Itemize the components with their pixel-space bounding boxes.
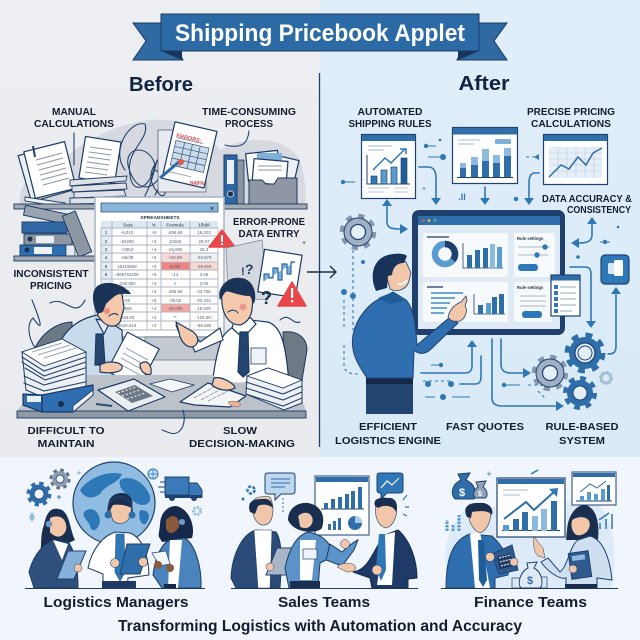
confused documents and chart xyxy=(226,240,306,308)
label: time-consuming process: TIME-CONSUMING xyxy=(202,106,296,118)
label: inconsistent pricing xyxy=(14,268,89,292)
sales dashboard board xyxy=(315,476,369,535)
label: difficult to maintain: DIFFICULT TO xyxy=(28,425,104,437)
spreadsheet window: 25.3 xyxy=(200,247,209,252)
spreadsheet window: -39.03 xyxy=(169,298,182,303)
spreadsheet window: :653.03 xyxy=(120,315,135,320)
spreadsheet window: +5 xyxy=(151,255,157,260)
label: automated shipping rules: SHIPPING RULES xyxy=(348,118,432,130)
icon: money bags: $ xyxy=(478,491,482,498)
spreadsheet window: × xyxy=(174,281,177,286)
loose papers on desk xyxy=(150,378,246,407)
stressed worker right xyxy=(176,278,289,390)
card: rule settings top: Rule settings xyxy=(517,236,544,241)
icon: globe small xyxy=(148,469,158,479)
calculator xyxy=(96,379,165,411)
spreadsheet window: 2 xyxy=(105,239,108,244)
icon: coins and bag: $ xyxy=(527,575,533,587)
ground line xyxy=(231,588,418,590)
label: error-prone data entry xyxy=(233,216,305,240)
spreadsheet window: -16,665 xyxy=(168,247,183,252)
label: rule-based system xyxy=(546,421,619,447)
spreadsheet window: +3 xyxy=(151,239,157,244)
label: sales teams: Sales Teams xyxy=(278,594,370,611)
globe xyxy=(73,462,155,544)
tagline: Transforming Logistics with Automation and Accuracy xyxy=(118,618,522,635)
spreadsheet window: 5 xyxy=(105,264,108,269)
spreadsheet window: -53265 xyxy=(120,239,134,244)
spreadsheet window: 83.403 xyxy=(197,298,211,303)
label: error-prone data entry: ERROR-PRONE xyxy=(233,216,305,228)
spreadsheet window: 50 xyxy=(125,289,130,294)
window: line chart xyxy=(544,134,608,184)
confused documents and chart: ? xyxy=(261,288,272,308)
label: slow decision-making: SLOW xyxy=(223,425,257,437)
large growth chart xyxy=(497,478,565,537)
spreadsheet window: +3 xyxy=(151,315,157,320)
spreadsheet window: 3665 xyxy=(122,306,132,311)
small growth chart xyxy=(572,472,616,505)
title banner: Shipping Pricebook Applet xyxy=(175,20,465,47)
spreadsheet window: 5620.016 xyxy=(118,323,137,328)
label: inconsistent pricing: PRICING xyxy=(30,280,72,292)
label: efficient logistics engine: EFFICIENT xyxy=(359,421,418,433)
blue binder on shelf xyxy=(224,155,244,204)
panel: after background xyxy=(320,0,640,457)
person: salesman right xyxy=(337,498,417,588)
label: manual calculations: CALCULATIONS xyxy=(34,118,114,130)
panel: audience background xyxy=(0,457,640,640)
paper stack left xyxy=(22,339,86,396)
paper stack right xyxy=(246,368,302,410)
spreadsheet window: 1 xyxy=(105,230,108,235)
spreadsheet window: 6 xyxy=(105,272,108,277)
small decorations: + xyxy=(486,469,492,479)
spreadsheet window: +5 xyxy=(151,272,157,277)
heading: after: After xyxy=(458,73,510,95)
spreadsheet window: -290:052 xyxy=(118,281,136,286)
upper shelf xyxy=(14,204,307,209)
label: slow decision-making: DECISION-MAKING xyxy=(189,438,295,450)
monitor stand and wires xyxy=(145,337,225,360)
man presenting dashboard xyxy=(352,254,467,414)
tangled wires xyxy=(120,124,249,205)
stressed worker left xyxy=(58,283,159,388)
spreadsheet window: 5.009 xyxy=(170,264,181,269)
label: data accuracy and consistency xyxy=(542,193,632,216)
spreadsheet window: ** xyxy=(173,315,177,320)
window: rules chart xyxy=(362,134,416,198)
spreadsheet window: Formula xyxy=(166,222,184,228)
label: time-consuming process xyxy=(202,106,296,130)
confused documents and chart: + xyxy=(302,240,306,247)
spreadsheet window: 10258 xyxy=(169,239,182,244)
spreadsheet window: +4 xyxy=(151,289,157,294)
spreadsheet window: -368.69 xyxy=(168,289,183,294)
label: rule-based system: RULE-BASED xyxy=(546,421,619,433)
blue binder on desk xyxy=(23,385,93,412)
icon: coins and bag xyxy=(512,562,547,588)
spreadsheet window: × xyxy=(210,206,214,212)
label: error-prone data entry: DATA ENTRY xyxy=(238,228,300,240)
soft background blob xyxy=(445,500,615,588)
error document: ERRORS: xyxy=(176,133,202,145)
desk xyxy=(17,375,306,418)
gear: pale xyxy=(600,372,612,384)
spreadsheet window: +3353 xyxy=(121,247,134,252)
label: fast quotes: FAST QUOTES xyxy=(446,421,524,433)
spreadsheet window: 3 xyxy=(105,247,108,252)
card: donut and bars xyxy=(423,233,508,277)
paper stack: manual calculations xyxy=(18,133,127,207)
divider arrow from before to after xyxy=(307,73,336,447)
label: slow decision-making xyxy=(189,425,295,450)
spreadsheet window: 16,203 xyxy=(197,230,211,235)
audience: logistics managers xyxy=(25,462,205,588)
person: finance man xyxy=(446,503,518,588)
workflow arrows: + xyxy=(422,186,426,193)
spreadsheet window: 29.07 xyxy=(198,239,210,244)
icon: money bags xyxy=(452,473,487,499)
icon: shared document xyxy=(601,255,629,284)
confused documents and chart: ? xyxy=(245,261,254,277)
label: automated shipping rules xyxy=(348,106,432,130)
person: man with headset xyxy=(88,493,150,588)
gear: gray xyxy=(52,470,68,488)
gear: blue xyxy=(29,484,49,504)
person: finance woman xyxy=(534,505,612,588)
label: inconsistent pricing: INCONSISTENT xyxy=(14,268,89,280)
small decorations xyxy=(29,468,200,522)
spreadsheet window: -556791208 xyxy=(115,272,139,277)
confused documents and chart: ! xyxy=(241,266,245,278)
spreadsheet window: 1/fabl xyxy=(198,222,210,228)
icon: money bags: $ xyxy=(459,487,465,499)
spreadsheet window: +3 xyxy=(151,306,157,311)
spreadsheet window: -36/38 xyxy=(121,255,134,260)
spreadsheet window: +4 xyxy=(151,247,157,252)
card: rule settings top xyxy=(514,233,555,277)
label: rule-based system: SYSTEM xyxy=(559,435,605,447)
label: time-consuming process: PROCESS xyxy=(225,118,273,130)
spreadsheet window: -39.569 xyxy=(197,264,212,269)
spreadsheet window: +8 xyxy=(151,230,157,235)
ground line xyxy=(25,588,205,590)
spreadsheet window: -50 xyxy=(124,298,131,303)
small decorations xyxy=(242,486,409,516)
audience: sales teams xyxy=(231,473,418,588)
error document xyxy=(158,122,217,192)
error document: 849% xyxy=(190,181,204,187)
card: rule settings bottom xyxy=(514,282,552,322)
label: data accuracy and consistency: DATA ACCURACY & xyxy=(542,193,632,205)
background stress scribbles xyxy=(29,300,300,350)
background blob xyxy=(20,120,305,205)
title banner xyxy=(133,14,507,60)
label: precise pricing calculations: CALCULATIONS xyxy=(531,118,611,130)
ground line xyxy=(441,588,618,590)
label: precise pricing calculations: PRECISE PRICING xyxy=(527,106,615,118)
spreadsheet window: +50.69 xyxy=(168,255,182,260)
card: list and bars xyxy=(423,282,508,322)
label: manual calculations: MANUAL xyxy=(52,106,97,118)
binders on lower shelf xyxy=(14,205,95,261)
panel: before background xyxy=(0,0,320,457)
warning triangle upper xyxy=(209,230,235,247)
label: difficult to maintain: MAINTAIN xyxy=(38,438,94,450)
label: manual calculations xyxy=(34,106,114,130)
illustration: cluttered before workspace xyxy=(14,120,307,433)
document folder xyxy=(246,150,299,204)
person: woman left xyxy=(29,509,86,588)
spreadsheet window: +3 xyxy=(151,281,157,286)
spreadsheet window: -295.69 xyxy=(168,230,183,235)
person: saleswoman xyxy=(285,503,358,588)
label: efficient logistics engine xyxy=(335,421,441,447)
label: difficult to maintain xyxy=(28,425,104,450)
person: woman right xyxy=(152,506,201,588)
workflow arrows: .ll xyxy=(458,192,466,202)
audience: finance teams xyxy=(441,469,618,588)
spreadsheet window: -86.690 xyxy=(197,323,212,328)
spreadsheet window: -6,010 xyxy=(121,230,134,235)
spreadsheet window: 3.09 xyxy=(200,281,209,286)
gear: gray upper left xyxy=(343,217,373,247)
label: finance teams: Finance Teams xyxy=(474,594,587,611)
spreadsheet window: 125.50 xyxy=(197,315,211,320)
label: precise pricing calculations xyxy=(527,106,615,130)
spreadsheet window xyxy=(95,197,224,337)
person: salesman left xyxy=(231,496,294,588)
spreadsheet window: 3.69 xyxy=(200,272,209,277)
gear: blue large xyxy=(568,336,602,370)
small decorations xyxy=(447,469,612,531)
speech bubble left xyxy=(265,473,295,500)
spreadsheet window: 16319559 xyxy=(117,264,137,269)
label: automated shipping rules: AUTOMATED xyxy=(358,106,423,118)
wire under desk xyxy=(162,410,184,433)
spreadsheet window: 4 xyxy=(105,255,108,260)
chair left xyxy=(34,322,72,375)
spreadsheet window: -36.095 xyxy=(168,306,183,311)
spreadsheet window: +5 xyxy=(151,298,157,303)
gear cluster xyxy=(535,336,612,407)
label: efficient logistics engine: LOGISTICS ENGINE xyxy=(335,435,441,447)
chair right xyxy=(283,332,307,380)
illustration: automated after workflow xyxy=(341,128,629,414)
icon: delivery truck xyxy=(158,477,202,501)
spreadsheet window: 33.755 xyxy=(197,289,211,294)
spreadsheet window: -14 xyxy=(172,272,179,277)
small decorations: + xyxy=(76,468,82,478)
heading: before: Before xyxy=(129,74,193,96)
popup checklist window xyxy=(551,275,580,316)
spreadsheet window: 15.509 xyxy=(197,306,211,311)
spreadsheet window: SPREADSHEETS xyxy=(140,215,180,221)
wire loops xyxy=(151,155,165,196)
spreadsheet window: -33.879 xyxy=(197,255,212,260)
card: rule settings bottom: Rule settings xyxy=(517,285,544,290)
spreadsheet window: Data xyxy=(123,222,133,228)
speech bubble right xyxy=(377,473,403,499)
gear: gray xyxy=(535,358,565,388)
spreadsheet window: +3 xyxy=(151,264,157,269)
window: bar chart xyxy=(452,128,518,184)
tablet dashboard xyxy=(412,210,565,335)
spreadsheet window: +3 xyxy=(151,323,157,328)
label: logistics managers: Logistics Managers xyxy=(44,594,188,611)
spreadsheet window: % xyxy=(152,222,156,228)
gear: blue small xyxy=(566,379,594,407)
workflow arrows xyxy=(341,139,621,411)
